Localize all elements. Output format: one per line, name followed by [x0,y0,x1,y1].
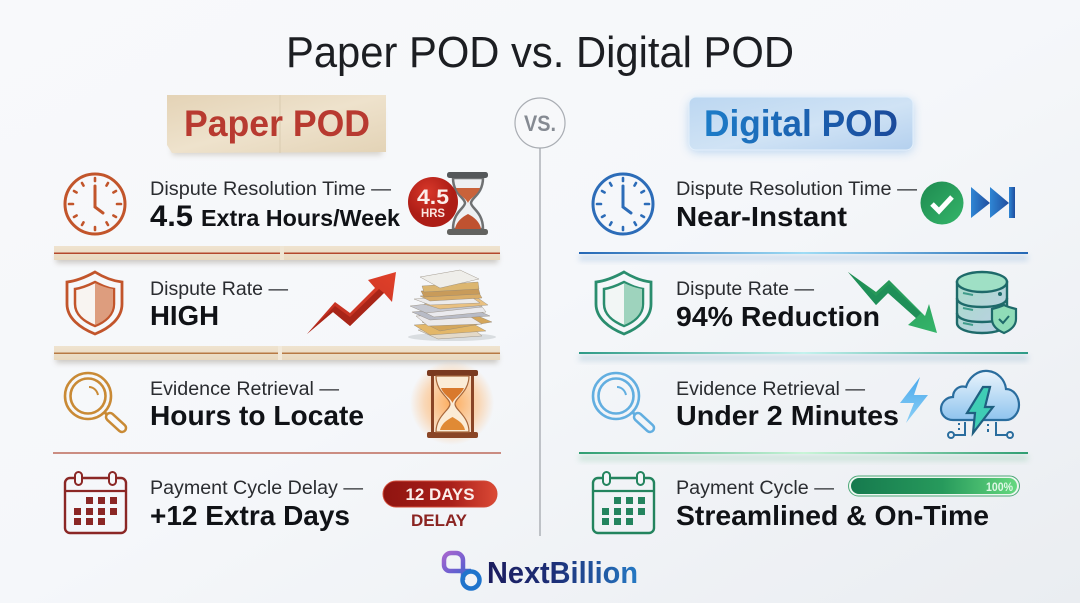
divider: green line [579,452,1028,461]
heading: Digital POD [689,97,913,152]
icon: logo mark [444,553,480,588]
text: dispute rate: Dispute Rate — [676,279,814,300]
icon: calendar [65,472,126,533]
logo: NextBillion [444,553,638,590]
callout: 12 days delay: DELAY [411,512,467,530]
row: payment cycle delay [65,472,497,533]
text: evidence retrieval: Evidence Retrieval — [150,379,339,400]
title: Paper POD vs. Digital POD [286,28,794,77]
row: evidence retrieval [593,371,1019,438]
text: HIGH: HIGH [150,300,219,331]
icon: fast forward [971,187,1015,218]
icon: magnifier [593,373,650,428]
row: payment cycle [593,472,1020,533]
progress bar: 100%: 100% [986,482,1013,494]
heading: Paper POD [167,95,386,155]
VS badge: VS. [524,111,556,136]
row: evidence retrieval [65,361,494,445]
divider: torn paper strip 2 [54,346,500,363]
icon: lightning bolt [900,377,928,423]
divider: torn paper strip 1 [54,246,500,263]
icon: glowing hourglass [410,361,494,445]
icon: magnifier [65,373,122,428]
icon: hourglass with badge [408,172,488,235]
text: NextBillion: NextBillion [487,555,638,590]
text: payment cycle delay: Payment Cycle Delay — [150,478,363,499]
icon: shield [67,272,122,334]
icon: hourglass with badge: HRS [421,208,445,220]
text: dispute resolution time: Dispute Resolution Time — [150,179,391,200]
panel: Paper POD [53,95,501,533]
icon: check circle [920,182,964,224]
text: hours to locate: Hours to Locate [150,400,364,431]
icon: database with shield [957,272,1016,333]
heading: Paper POD: Paper POD [184,103,370,144]
icon: clock [65,174,125,234]
divider: teal line [579,352,1028,361]
progress bar: 100% [848,476,1020,496]
heading: Digital POD: Digital POD [704,103,898,144]
icon: hourglass with badge: 4.5 [417,186,449,209]
text: near-instant: Near-Instant [676,201,847,232]
icon: clock [593,174,653,234]
callout: 12 days delay [383,481,497,530]
divider: blue line [579,252,1028,261]
text: dispute resolution time: Dispute Resolution Time — [676,179,917,200]
icon: cloud with bolt [941,371,1019,438]
icon: falling green arrow [848,272,937,333]
text: payment cycle: Payment Cycle — [676,478,834,499]
row: dispute resolution time [65,172,488,235]
text: +12 extra days: +12 Extra Days [150,500,350,531]
text: streamlined and on-time: Streamlined & On-Time [676,500,989,531]
icon: rising red arrow [307,272,396,334]
text: dispute rate: Dispute Rate — [150,279,288,300]
text: evidence retrieval: Evidence Retrieval — [676,379,865,400]
row: dispute rate [67,270,496,341]
text: 4.5 extra hours per week: 4.5 [150,200,193,233]
panel: Digital POD [579,97,1028,533]
center divider [539,148,541,536]
icon: stack of papers [408,270,496,341]
icon: shield [596,272,651,334]
row: dispute rate [596,272,1016,334]
icon: calendar [593,472,654,533]
text: 4.5 extra hours per week: Extra Hours/Week [201,205,401,231]
VS badge [515,98,565,148]
text: 94% reduction: 94% Reduction [676,301,880,332]
callout: 12 days delay: 12 DAYS [406,486,474,504]
text: under 2 minutes: Under 2 Minutes [676,400,899,431]
row: dispute resolution time [593,174,1015,234]
divider: thin red line [53,452,501,454]
